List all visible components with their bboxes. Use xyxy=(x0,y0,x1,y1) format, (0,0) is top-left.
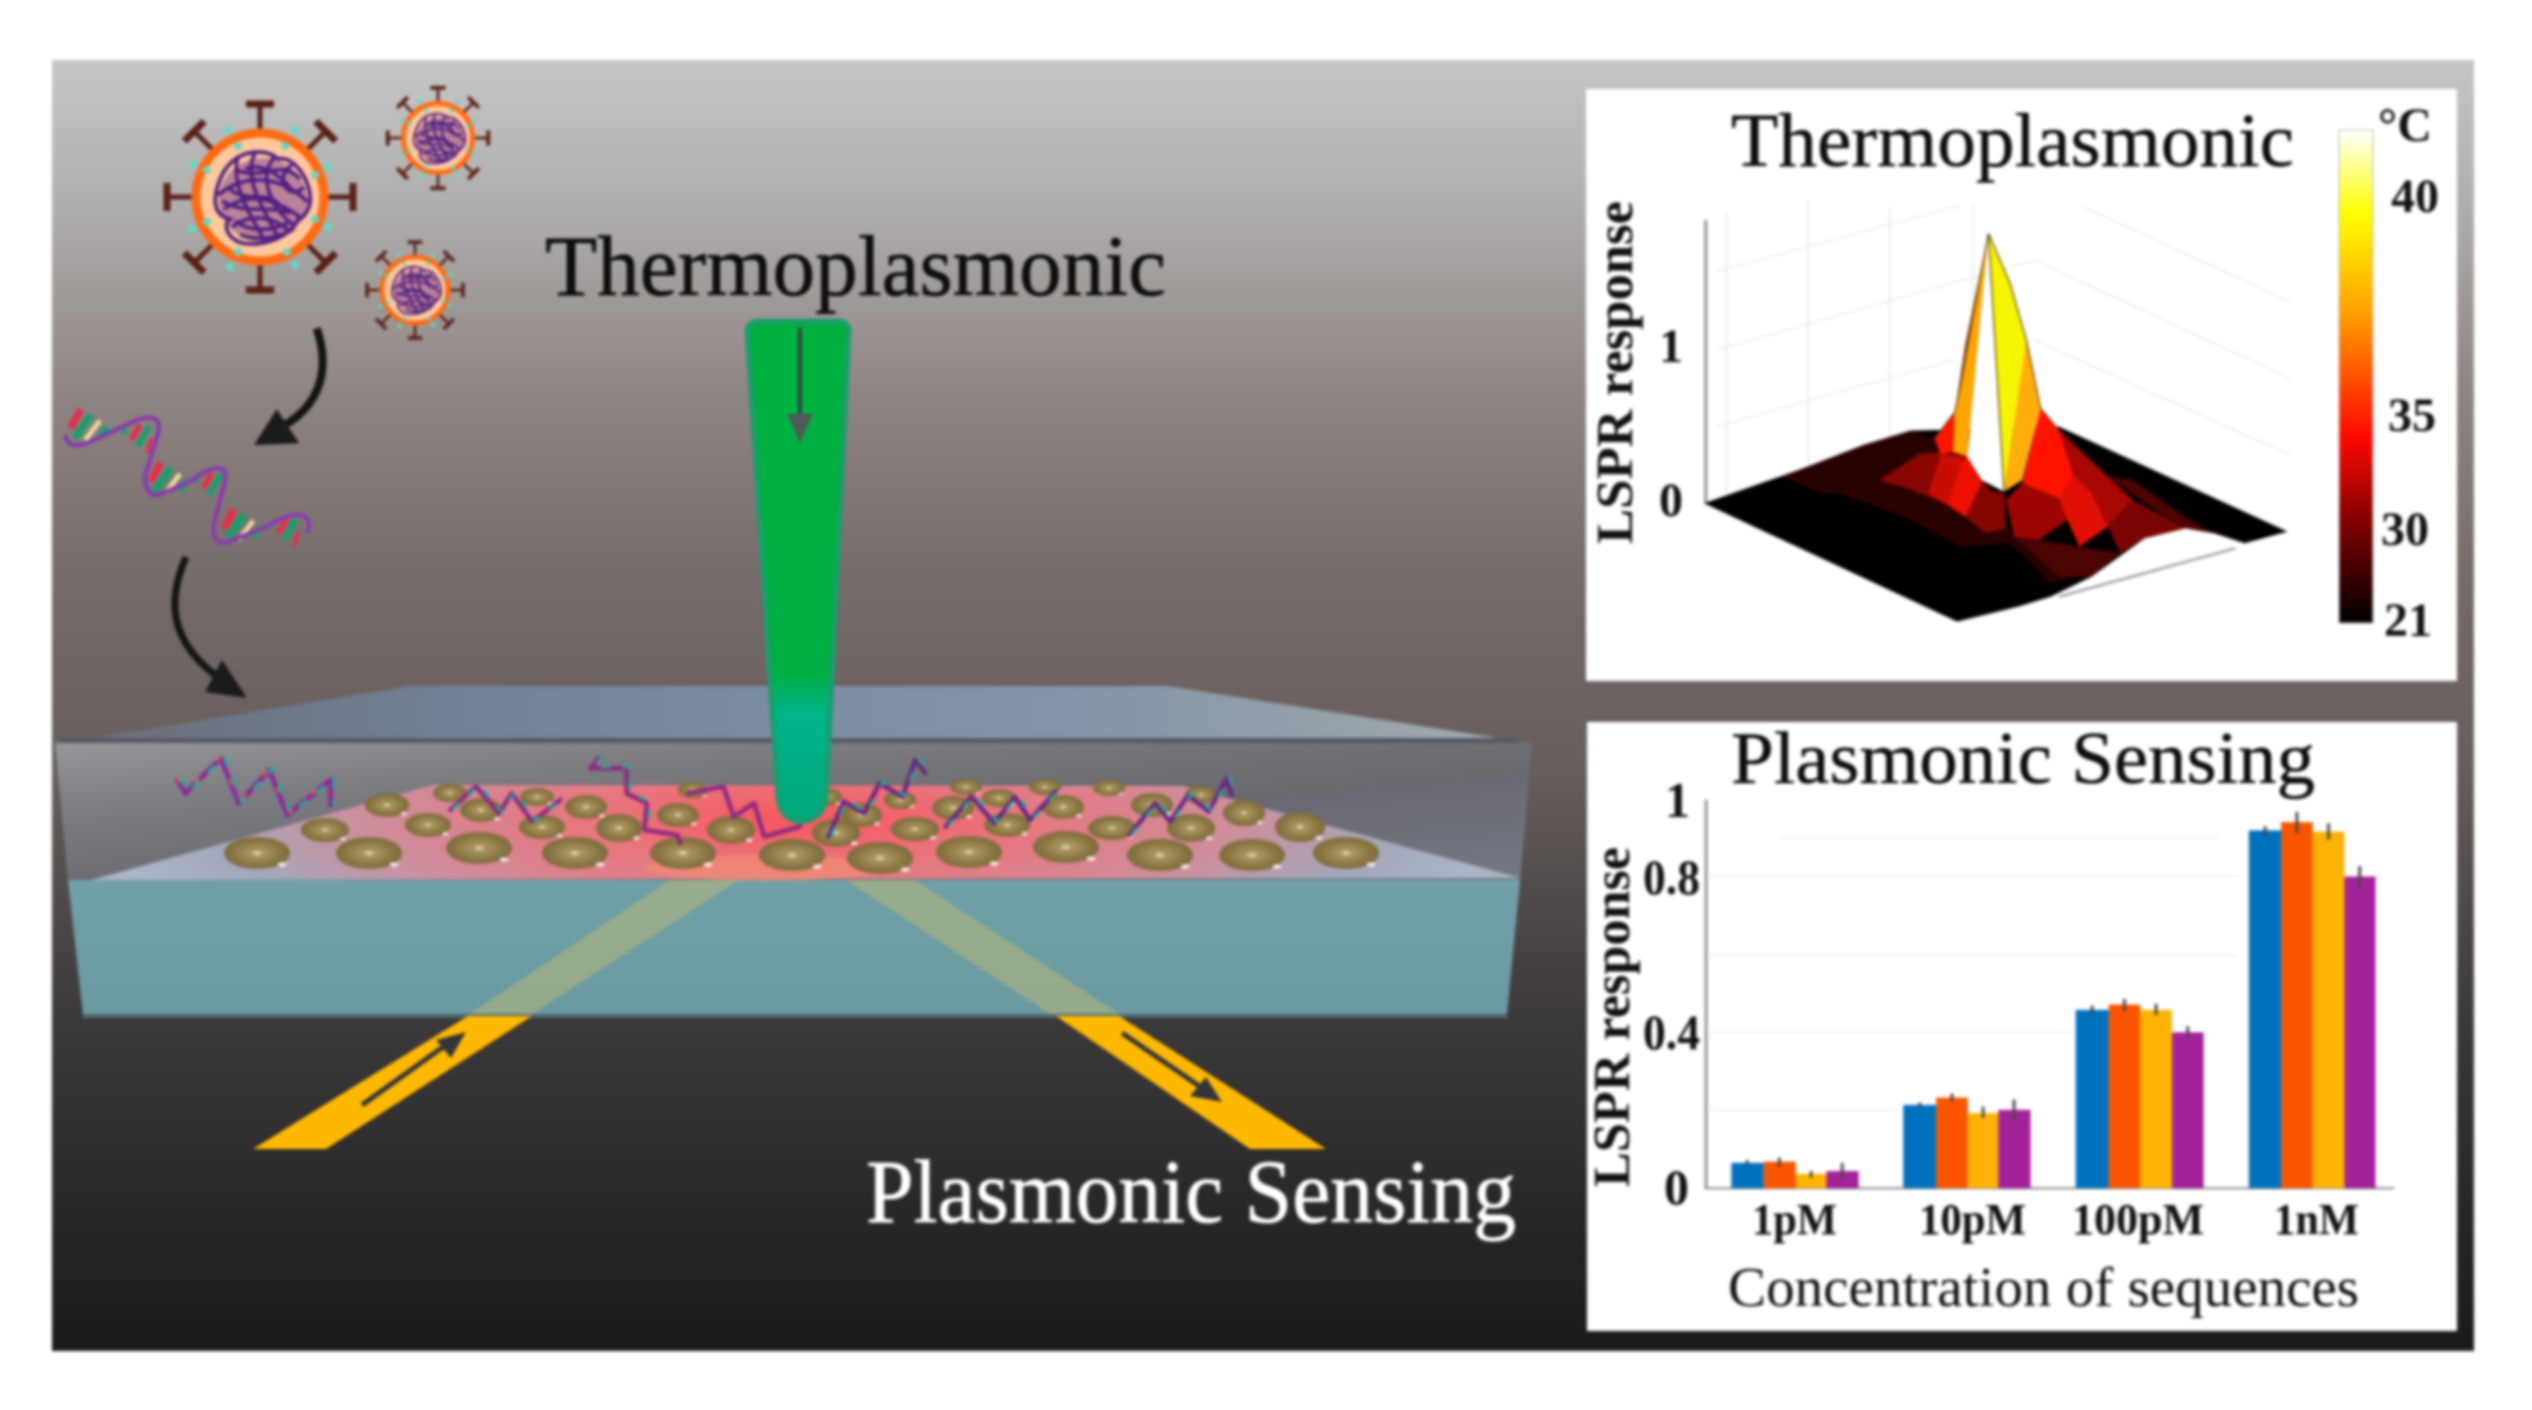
x label 1pM: 1pM xyxy=(1752,1195,1837,1244)
substrate block xyxy=(68,880,1520,1015)
green laser beam xyxy=(747,321,849,822)
small DNA strands, left xyxy=(178,757,800,843)
icon: large virus xyxy=(167,104,353,290)
x axis title: Concentration of sequences xyxy=(1728,1257,2359,1319)
small DNA strands, right xyxy=(828,759,1235,837)
arrow: incident light direction xyxy=(362,1032,466,1105)
colorbar tick 21: 21 xyxy=(2384,594,2432,647)
panel: thermoplasmonic chart xyxy=(1586,89,2457,681)
panel: plasmonic sensing chart xyxy=(1584,718,2457,1331)
bar chart xyxy=(1706,800,2394,1188)
y axis title: LSPR response xyxy=(1584,847,1641,1187)
icon: RNA strand xyxy=(65,409,309,547)
chart title: Plasmonic Sensing xyxy=(1731,718,2315,800)
reflected light through substrate xyxy=(846,880,1119,1014)
heading: Thermoplasmonic: Thermoplasmonic xyxy=(545,218,1166,314)
y tick 0.4: 0.4 xyxy=(1643,1004,1700,1060)
icon: small virus bottom xyxy=(367,242,463,338)
arrow: reflected light direction xyxy=(1122,1033,1222,1102)
colorbar tick 35: 35 xyxy=(2388,389,2436,442)
glowing focus spot xyxy=(645,855,885,881)
x label 1nM: 1nM xyxy=(2274,1195,2359,1244)
colorbar tick 30: 30 xyxy=(2381,503,2429,556)
y tick 0: 0 xyxy=(1664,1159,1689,1215)
nanoparticle floor with heat glow xyxy=(91,785,1520,880)
arrow: virus to RNA xyxy=(254,328,323,445)
arrow: RNA to sensor xyxy=(175,557,247,698)
gold nanoparticles xyxy=(224,779,1379,874)
x label 100pM: 100pM xyxy=(2072,1195,2204,1244)
panel background xyxy=(1586,89,2457,681)
slab front glass xyxy=(55,743,1532,880)
x label 10pM: 10pM xyxy=(1919,1195,2026,1244)
colorbar xyxy=(2339,130,2373,623)
y axis title: LSPR response xyxy=(1587,201,1644,544)
incident yellow light strip xyxy=(253,1016,532,1149)
y tick 0: 0 xyxy=(1659,474,1683,527)
colorbar unit: °C xyxy=(2378,99,2432,152)
substrate lower edge xyxy=(83,1014,1507,1018)
glass edge line xyxy=(60,738,1518,743)
reflected yellow light strip xyxy=(1056,1016,1326,1149)
panel background xyxy=(1587,722,2457,1331)
heading: Plasmonic Sensing: Plasmonic Sensing xyxy=(866,1143,1516,1242)
y tick 1: 1 xyxy=(1665,772,1690,828)
colorbar tick 40: 40 xyxy=(2391,170,2439,223)
incident light through substrate xyxy=(470,880,739,1014)
chart title: Thermoplasmonic xyxy=(1731,99,2294,183)
y tick 0.8: 0.8 xyxy=(1643,849,1700,905)
arrow: laser direction xyxy=(787,328,813,443)
icon: small virus top xyxy=(388,88,488,188)
panel: sensor chip xyxy=(55,686,1532,1149)
slab top cover xyxy=(86,686,1504,739)
3D surface plot xyxy=(1704,200,2290,622)
y tick 1: 1 xyxy=(1659,320,1683,373)
